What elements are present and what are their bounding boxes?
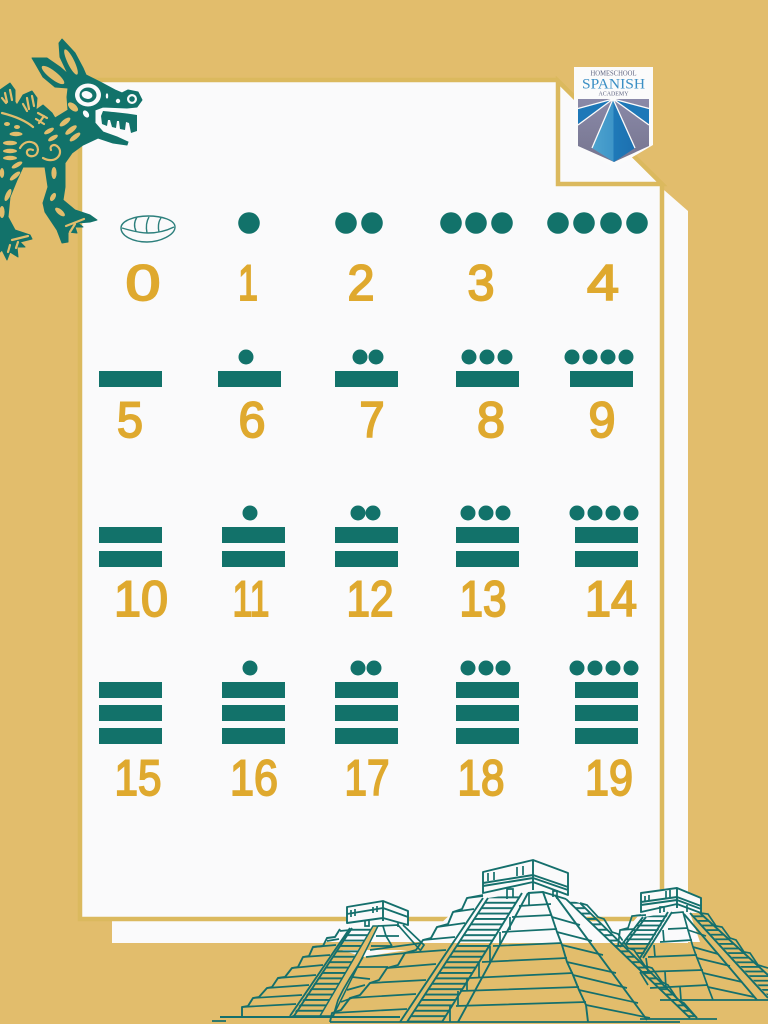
numeral row 3 glyphs [99,506,638,567]
left pyramid [212,901,424,1021]
center pyramid [330,860,717,1022]
numbers 0-19: 13 [460,571,506,627]
numbers 0-19: 4 [587,255,619,311]
jaguar eye [75,84,101,106]
numbers 0-19: 19 [585,750,633,806]
numeral row 1 glyph dots [238,212,648,234]
jaguar silhouette [0,39,142,260]
center front tiers [528,892,588,1022]
numbers 0-19: 2 [348,255,374,311]
logo: Homeschool Spanish Academy shield: ACADEMY [598,92,629,98]
numbers 0-19: 8 [477,392,505,448]
logo: Homeschool Spanish Academy shield [574,67,653,168]
shield base [574,67,653,168]
left pyramid right side [333,925,424,1017]
center right stair [555,895,697,1020]
icon: jaguar creature [0,39,142,260]
logo: Homeschool Spanish Academy shield: SPANISH [582,76,645,92]
numbers 0-19: 18 [458,750,504,806]
numbers 0-19: 1 [238,255,258,311]
zero glyph: shell [121,216,175,242]
numbers 0-19: 11 [232,571,270,627]
numbers 0-19: 14 [585,571,637,627]
folded corner [558,81,662,184]
numbers 0-19: 10 [114,571,168,627]
jaguar ear inner shapes [40,63,66,87]
numbers 0-19: 6 [238,392,266,448]
numbers 0-19: 5 [117,392,143,448]
numeral row 2 glyphs [99,350,634,387]
center left stair [407,893,522,1022]
pyramids illustration [212,860,768,1022]
jaguar snout ring [127,94,137,104]
center temple [483,860,568,895]
right temple [641,888,701,913]
numbers 0-19: 17 [344,750,390,806]
left temple [347,901,408,925]
right left stair [623,913,669,957]
right pyramid [618,888,768,1000]
numeral row 4 glyphs [99,660,638,744]
shield rays [578,99,649,162]
logo text: HOMESCHOOL [590,70,636,78]
right right stair [684,913,768,1000]
numbers 0-19: 3 [468,255,494,311]
left pyramid tiers [242,929,340,1016]
jaguar teeth [101,111,137,133]
numbers 0-19: 7 [360,392,384,448]
jaguar gold markings [0,101,82,218]
numbers 0-19: 0 [126,255,160,311]
back paper sheet [112,190,688,943]
center tiers left silhouette [330,895,483,1022]
numbers 0-19: 15 [114,750,162,806]
numbers 0-19: 12 [346,571,394,627]
numbers 0-19: 16 [230,750,278,806]
right tiers [618,912,768,1000]
numbers 0-19: 9 [588,392,616,448]
front paper sheet with folded corner [80,80,662,919]
numbers 0-19 [114,255,637,806]
left stair [292,926,373,1016]
center right face tiers [543,892,650,1018]
